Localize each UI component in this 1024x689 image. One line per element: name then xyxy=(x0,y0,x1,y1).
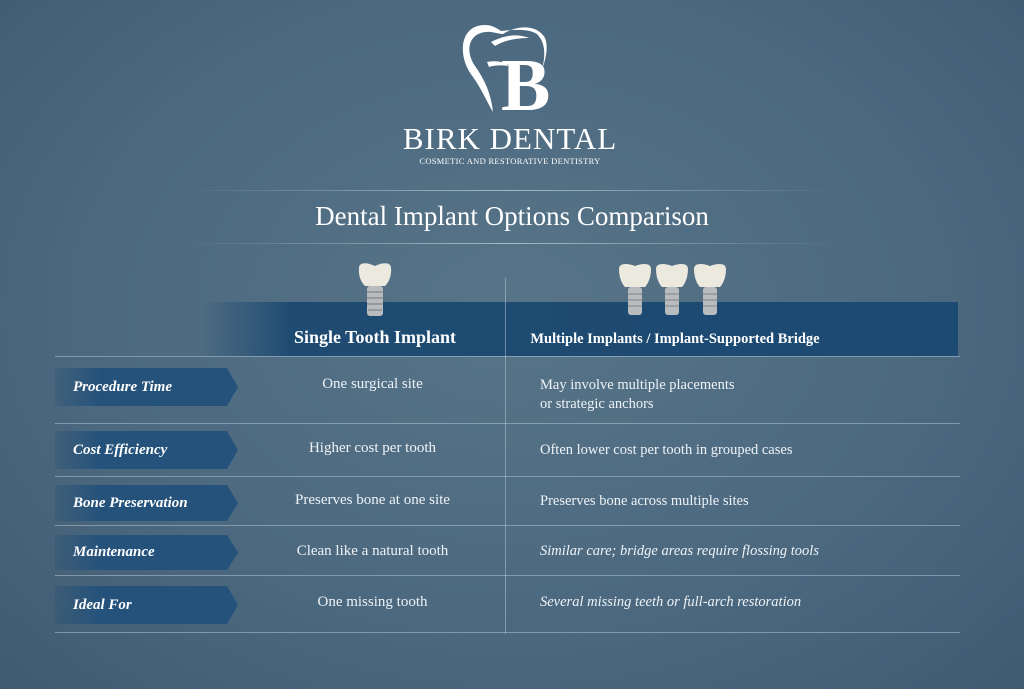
multiple cell: or strategic anchors xyxy=(540,396,654,412)
multiple cell: May involve multiple placements xyxy=(540,377,734,393)
row: maintenance xyxy=(55,535,819,570)
single cell: One surgical site xyxy=(322,376,423,392)
single cell: Preserves bone at one site xyxy=(295,492,450,508)
label tab: Maintenance xyxy=(73,544,155,560)
label tab xyxy=(55,485,238,521)
label tab: Procedure Time xyxy=(73,378,172,394)
title: Dental Implant Options Comparison xyxy=(315,201,709,231)
label tab: Ideal For xyxy=(73,596,132,612)
multiple cell: Preserves bone across multiple sites xyxy=(540,493,749,509)
single cell: Clean like a natural tooth xyxy=(297,543,448,559)
multiple cell: Often lower cost per tooth in grouped cases xyxy=(540,442,792,458)
tagline: COSMETIC AND RESTORATIVE DENTISTRY xyxy=(419,156,601,166)
icon: tooth B xyxy=(462,25,550,117)
icon: single implant xyxy=(358,263,392,316)
multiple cell: Several missing teeth or full-arch restoration xyxy=(540,594,801,610)
logo xyxy=(403,25,617,166)
column heading: multiple: Multiple Implants / Implant-Supported Bridge xyxy=(530,331,820,347)
row: ideal for xyxy=(56,586,801,624)
label tab xyxy=(55,586,238,624)
single cell: One missing tooth xyxy=(317,594,428,610)
icon: multiple implants xyxy=(619,264,726,315)
column heading: single: Single Tooth Implant xyxy=(294,327,456,347)
multiple cell: Similar care; bridge areas require flossing tools xyxy=(540,543,819,559)
label tab xyxy=(55,368,238,406)
label tab xyxy=(55,535,238,570)
label tab: Bone Preservation xyxy=(73,494,188,510)
vertical divider xyxy=(505,278,506,634)
row: procedure time xyxy=(55,368,734,412)
label tab xyxy=(55,431,238,469)
header band xyxy=(200,302,958,356)
brand name: BIRK DENTAL xyxy=(403,121,617,156)
label tab: Cost Efficiency xyxy=(73,442,167,458)
row: cost efficiency xyxy=(55,431,792,469)
multiple cell xyxy=(540,377,734,412)
single cell: Higher cost per tooth xyxy=(309,440,436,456)
row: bone preservation xyxy=(55,485,749,521)
